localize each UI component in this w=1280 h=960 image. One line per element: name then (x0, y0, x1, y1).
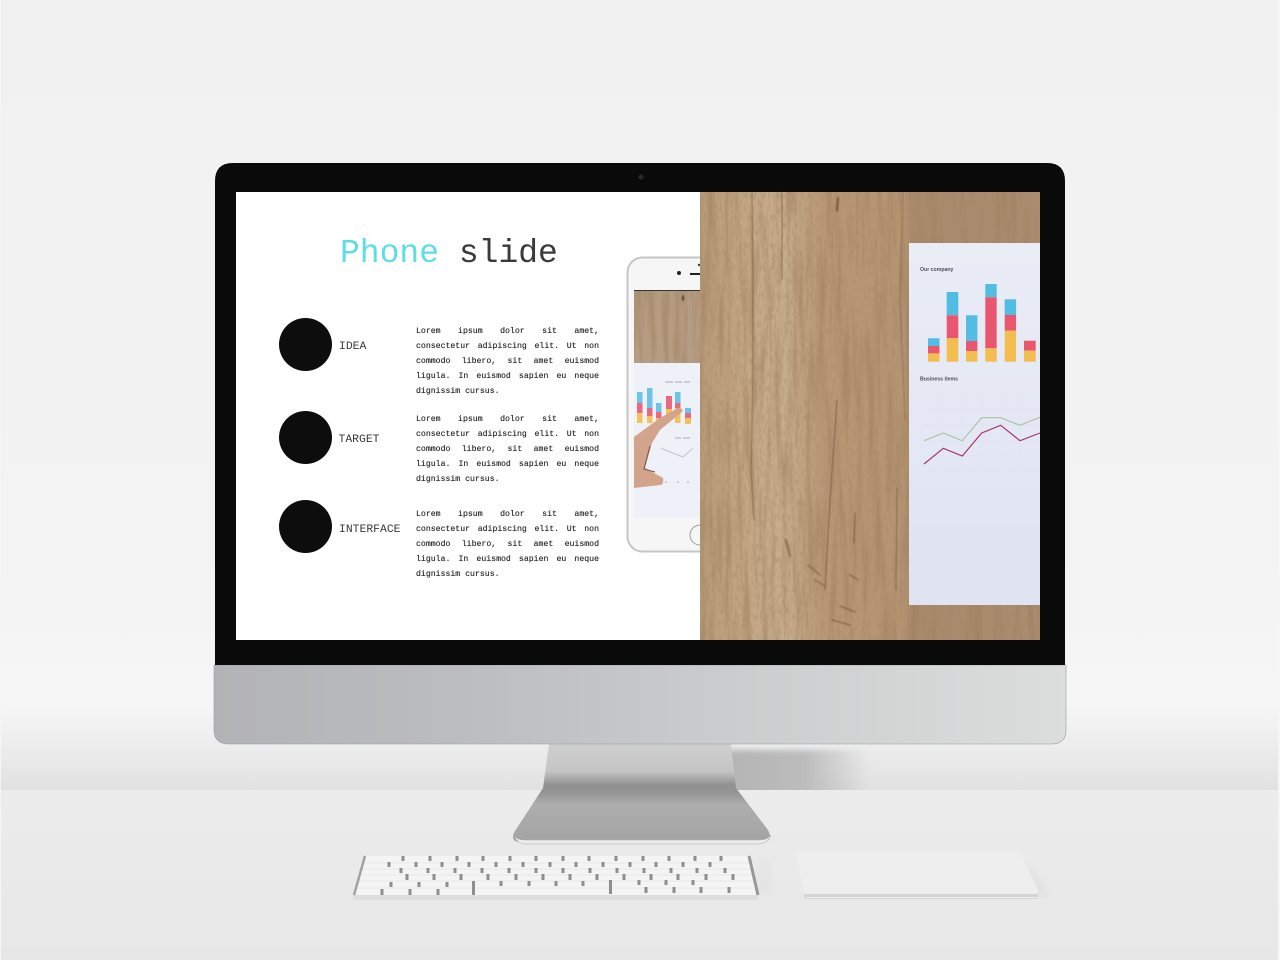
panel: interface (279, 500, 401, 553)
trackpad (797, 852, 1038, 899)
monitor chin (214, 665, 1066, 744)
slide background (236, 192, 1040, 640)
line chart on paper (924, 390, 1040, 472)
hand pointing at the chart (634, 408, 682, 488)
icon: interface circle (279, 500, 332, 553)
text block: interface: Lorem ipsum dolor sit amet, consectetur adipiscing elit. Ut non commodo libero, sit amet euismod ligula. In euismod sapien eu neque dignissim cursus. (416, 510, 599, 579)
panel: target (279, 411, 380, 464)
phone stacked bars (637, 388, 691, 424)
label: interface: INTERFACE (339, 524, 401, 536)
text block: target: Lorem ipsum dolor sit amet, consectetur adipiscing elit. Ut non commodo libero, sit amet euismod ligula. In euismod sapien eu neque dignissim cursus. (416, 415, 599, 484)
monitor, desk and desktop scene (1, 163, 1278, 900)
phone chart paper (634, 363, 700, 518)
phone home button (690, 524, 700, 546)
trackpad and keyboard contact shadows on desk (758, 858, 1050, 896)
phone wood image (634, 290, 700, 363)
text block: idea: Lorem ipsum dolor sit amet, consectetur adipiscing elit. Ut non commodo libero, sit amet euismod ligula. In euismod sapien eu neque dignissim cursus. (416, 327, 599, 396)
phone line chart (661, 448, 693, 457)
keyboard key gaps (382, 856, 733, 895)
paper heading: business items: Business items (920, 376, 958, 382)
paper with charts (909, 243, 1040, 605)
icon: target circle (279, 411, 332, 464)
phone mockup (626, 256, 700, 552)
label: target: TARGET (338, 434, 380, 446)
monitor shadow on wall (732, 747, 858, 790)
title: Phone slide (340, 235, 558, 272)
camera (638, 174, 644, 180)
paper heading: our company: Our company (920, 267, 954, 273)
label: idea: IDEA (339, 340, 366, 352)
panel: idea (279, 318, 366, 371)
phone speaker and camera (677, 264, 702, 275)
monitor bezel (215, 163, 1065, 665)
monitor stand (513, 744, 771, 844)
wood panel (700, 192, 1040, 640)
stacked bar chart on paper (928, 284, 1036, 362)
keyboard (353, 856, 758, 900)
wood cracks and knots (751, 192, 905, 625)
icon: idea circle (279, 318, 332, 371)
phone chart legend marks (665, 382, 690, 482)
